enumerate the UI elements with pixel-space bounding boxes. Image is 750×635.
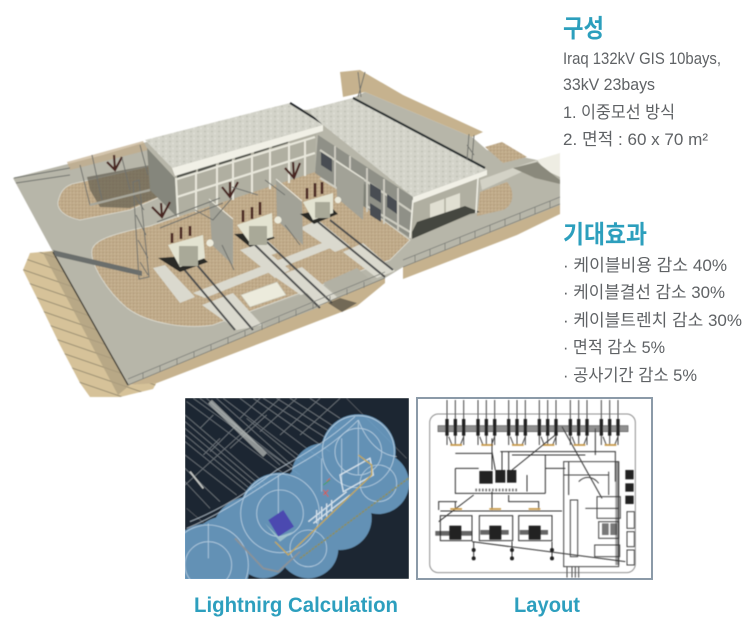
busbar [438, 426, 628, 432]
ground: lower-left tan strip [23, 251, 157, 397]
trench paving slabs [153, 220, 395, 330]
text block: composition details [563, 49, 721, 149]
building 2 side wall [315, 135, 413, 238]
ground: back tan strip [340, 70, 483, 137]
boundary lines [275, 455, 372, 555]
building 1 roof [145, 103, 323, 168]
text block: expected effects list: · 면적 감소 5% [563, 338, 665, 357]
building 2 [307, 98, 487, 239]
back tan edge left [67, 141, 148, 170]
ground: paved concrete slab [13, 92, 560, 385]
transformer bays [440, 516, 552, 558]
text block: expected effects list: · 케이블트렌치 감소 30% [563, 311, 742, 330]
text block: composition details: Iraq 132kV GIS 10bays, [563, 49, 721, 68]
image: layout drawing [416, 397, 653, 580]
grey pads [250, 293, 320, 327]
heading: composition: 구성 [563, 15, 604, 43]
ground: gravel yard left [58, 166, 160, 220]
cable trenches [183, 220, 393, 330]
GIS blocks [479, 470, 516, 484]
text block: expected effects list [563, 256, 742, 385]
text block: expected effects list: · 케이블결선 감소 30% [563, 283, 725, 302]
transformer 2 [234, 202, 282, 247]
GIS block [268, 510, 294, 537]
concrete pad [241, 282, 286, 307]
heading: expected effects: 기대효과 [563, 221, 647, 249]
caption: layout: Layout [514, 594, 580, 617]
transformer 1 [158, 226, 214, 272]
text block: expected effects list: · 공사기간 감소 5% [563, 366, 697, 385]
pale strip and dark corner at right [480, 160, 537, 190]
frame [417, 398, 652, 579]
CAD wireframe background [185, 398, 340, 508]
fire walls [209, 161, 364, 265]
control building plan [564, 462, 634, 578]
text block: composition details: 1. 이중모선 방식 [563, 103, 675, 122]
ground: right tan strip [403, 203, 560, 279]
ground: gravel yard right [477, 182, 512, 216]
building 1 [145, 103, 323, 217]
transformers [158, 182, 341, 272]
ground: gravel yard main [92, 170, 410, 326]
text block: composition details: 2. 면적 : 60 x 70 m² [563, 130, 708, 149]
cable routes [439, 427, 625, 562]
ground: lower tan strip [128, 278, 385, 385]
transformer 3 [300, 182, 341, 224]
incoming bays [447, 400, 618, 445]
text block: expected effects list: · 케이블비용 감소 40% [563, 256, 727, 275]
gantry towers and steel [14, 72, 474, 279]
perimeter fence [128, 197, 560, 385]
image: lightning calculation [185, 398, 409, 579]
building 1 front wall [175, 134, 316, 217]
building 2 front wall [410, 178, 480, 238]
dark shrub [328, 298, 357, 312]
caption: lightning calculation: Lightnirg Calculation [194, 594, 398, 617]
illustration: 3D substation model [13, 70, 560, 397]
gantry shadow [53, 250, 142, 276]
sphere contour lines [168, 416, 397, 605]
surge arresters [107, 155, 300, 217]
site outline [430, 414, 635, 573]
shadow over left yard [87, 165, 158, 208]
building wireframe [308, 458, 373, 523]
protection spheres [167, 414, 409, 607]
building 1 side wall [147, 148, 177, 217]
building 2 roof [307, 98, 487, 197]
text block: composition details: 33kV 23bays [563, 75, 655, 94]
